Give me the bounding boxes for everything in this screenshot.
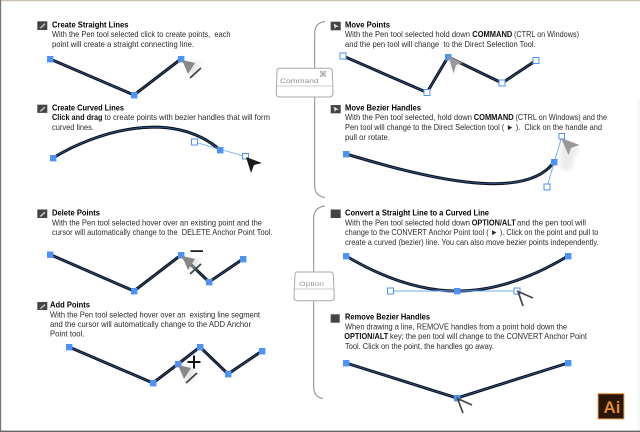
icon: Adobe Illustrator logo: [598, 394, 624, 419]
diagram: bezier curve with handles: [343, 134, 580, 190]
text block: When drawing a line, REMOVE handles from a point hold down the: [345, 321, 567, 331]
panel: delete points: [37, 208, 272, 294]
key: option: Option: [299, 281, 324, 288]
text block: With the Pen tool selected hover over an existing line segment: [50, 309, 261, 319]
text block: [345, 29, 579, 49]
heading: Delete Points: [52, 208, 100, 218]
text block: (CTRL on Windows): [514, 29, 579, 39]
text block: and the pen tool will change to the Direct Selection Tool.: [345, 39, 536, 49]
heading: Move Points: [345, 20, 390, 30]
text block: OPTION/ALT: [472, 218, 516, 228]
panel: convert straight line to curved line: [331, 208, 599, 306]
text block: With the Pen tool selected hold down: [345, 29, 470, 39]
icon: pen tool: [37, 21, 47, 30]
heading: Convert a Straight Line to a Curved Line: [345, 208, 489, 218]
heading: Remove Bezier Handles: [345, 312, 430, 322]
text block: [52, 218, 272, 237]
icon: direct selection tool: [331, 105, 341, 113]
panel: move points: [331, 20, 579, 96]
text block: to create points with bezier handles that will form: [104, 112, 270, 122]
text block: and the pen tool will: [517, 218, 586, 228]
diagram: path with selection arrow: [340, 53, 539, 96]
panel: add points: [37, 300, 265, 386]
icon: convert anchor tool: [331, 210, 341, 218]
text block: [345, 218, 599, 247]
text block: [52, 112, 270, 132]
diagram: corner point with convert cursor: [343, 360, 571, 413]
diagram: converted curve with handles: [343, 253, 571, 306]
icon: Adobe Illustrator logo: Ai: [604, 398, 620, 417]
panel: create curved lines: [37, 102, 270, 173]
text block: OPTION/ALT: [344, 331, 388, 341]
heading: Add Points: [50, 300, 90, 310]
text block: curved lines.: [52, 122, 94, 132]
text block: pull or rotate.: [345, 132, 390, 142]
text block: With the Pen tool selected, hold down: [345, 112, 472, 122]
panel: remove bezier handles: [331, 312, 588, 413]
icon: convert anchor tool: [331, 314, 340, 323]
diagram: path with add cursor: [66, 344, 265, 386]
diagram: straight path with pen cursor: [47, 56, 201, 98]
text block: Click and drag: [52, 112, 102, 122]
text block: Point tool.: [50, 329, 84, 339]
icon: direct selection tool: [331, 22, 341, 30]
bracket: command: [315, 22, 325, 198]
heading: Move Bezier Handles: [345, 102, 421, 112]
text block: point will create a straight connecting line.: [52, 39, 194, 49]
icon: pen tool: [37, 105, 47, 113]
text block: key; the pen tool will change to the CONVERT Anchor Point: [390, 331, 588, 341]
text block: [345, 112, 607, 142]
text block: Pen tool will change to the Direct Selection tool ( ► ). Click on the handle and: [345, 122, 602, 132]
text block: COMMAND: [472, 29, 512, 39]
text block: [50, 309, 261, 339]
key: command: ⌘: [319, 70, 327, 79]
text block: COMMAND: [474, 112, 514, 122]
text block: With the Pen tool selected hold down: [345, 218, 470, 228]
text block: With the Pen tool selected click to create points, each: [52, 29, 231, 39]
text block: and the cursor will automatically change to the ADD Anchor: [50, 319, 251, 329]
diagram: curved path with handles and arrow: [50, 127, 262, 173]
text block: Tool. Click on the point, the handles go away.: [345, 341, 494, 351]
text block: create a curved (bezier) line. You can also move bezier points independently.: [345, 237, 599, 247]
text block: With the Pen tool selected hover over an existing point and the: [52, 218, 262, 228]
text block: (CTRL on Windows) and the: [516, 112, 607, 122]
panel: move bezier handles: [331, 102, 607, 190]
text block: change to the CONVERT Anchor Point tool ( ► ). Click on the point and pull to: [345, 227, 599, 237]
key: command: Command: [280, 78, 319, 85]
diagram: path with delete cursor: [47, 250, 246, 294]
key: option: [294, 272, 334, 301]
panel: create straight lines: [37, 20, 231, 98]
icon: pen tool: [37, 302, 47, 310]
heading: Create Curved Lines: [52, 102, 124, 112]
heading: Create Straight Lines: [52, 20, 129, 30]
text block: cursor will automatically change to the DELETE Anchor Point Tool.: [52, 227, 272, 237]
text block: [344, 321, 588, 351]
bracket: option: [314, 206, 325, 398]
text block: [52, 29, 231, 49]
icon: pen tool: [37, 210, 47, 218]
key: command: [276, 68, 333, 97]
